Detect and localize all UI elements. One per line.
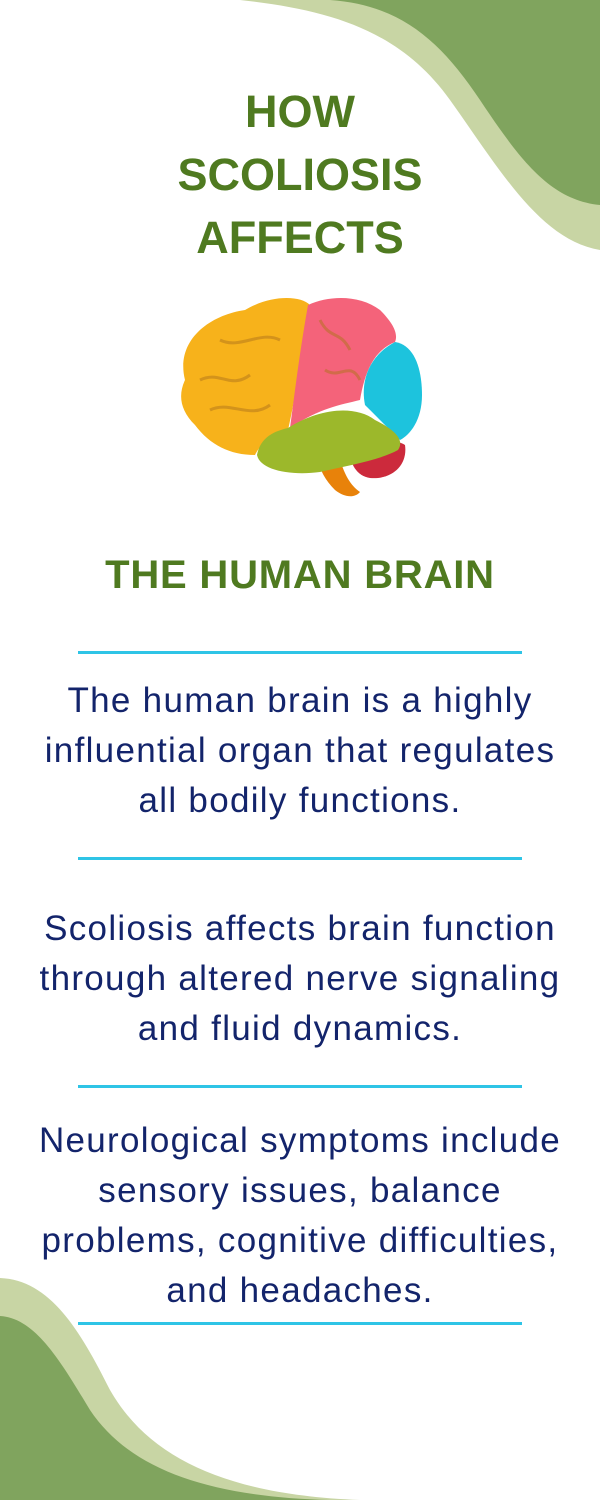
text block 3: problems, cognitive difficulties,	[42, 1221, 558, 1260]
title: SCOLIOSIS	[177, 149, 423, 200]
text block 2: and fluid dynamics.	[138, 1009, 462, 1048]
icon: brain	[181, 298, 422, 496]
text block 3	[39, 1121, 561, 1310]
text block 1	[45, 681, 555, 820]
title: AFFECTS	[196, 212, 404, 263]
text block 2	[40, 909, 560, 1048]
text block 3: sensory issues, balance	[98, 1171, 502, 1210]
text block 3: and headaches.	[166, 1271, 434, 1310]
text block 1: all bodily functions.	[138, 781, 462, 820]
text block 1: influential organ that regulates	[45, 731, 555, 770]
text block 1: The human brain is a highly	[67, 681, 533, 720]
text block 3: Neurological symptoms include	[39, 1121, 561, 1160]
heading: the human brain: THE HUMAN BRAIN	[105, 553, 495, 597]
title	[177, 86, 423, 263]
text block 2: through altered nerve signaling	[40, 959, 560, 998]
title: HOW	[245, 86, 355, 137]
text block 2: Scoliosis affects brain function	[44, 909, 556, 948]
